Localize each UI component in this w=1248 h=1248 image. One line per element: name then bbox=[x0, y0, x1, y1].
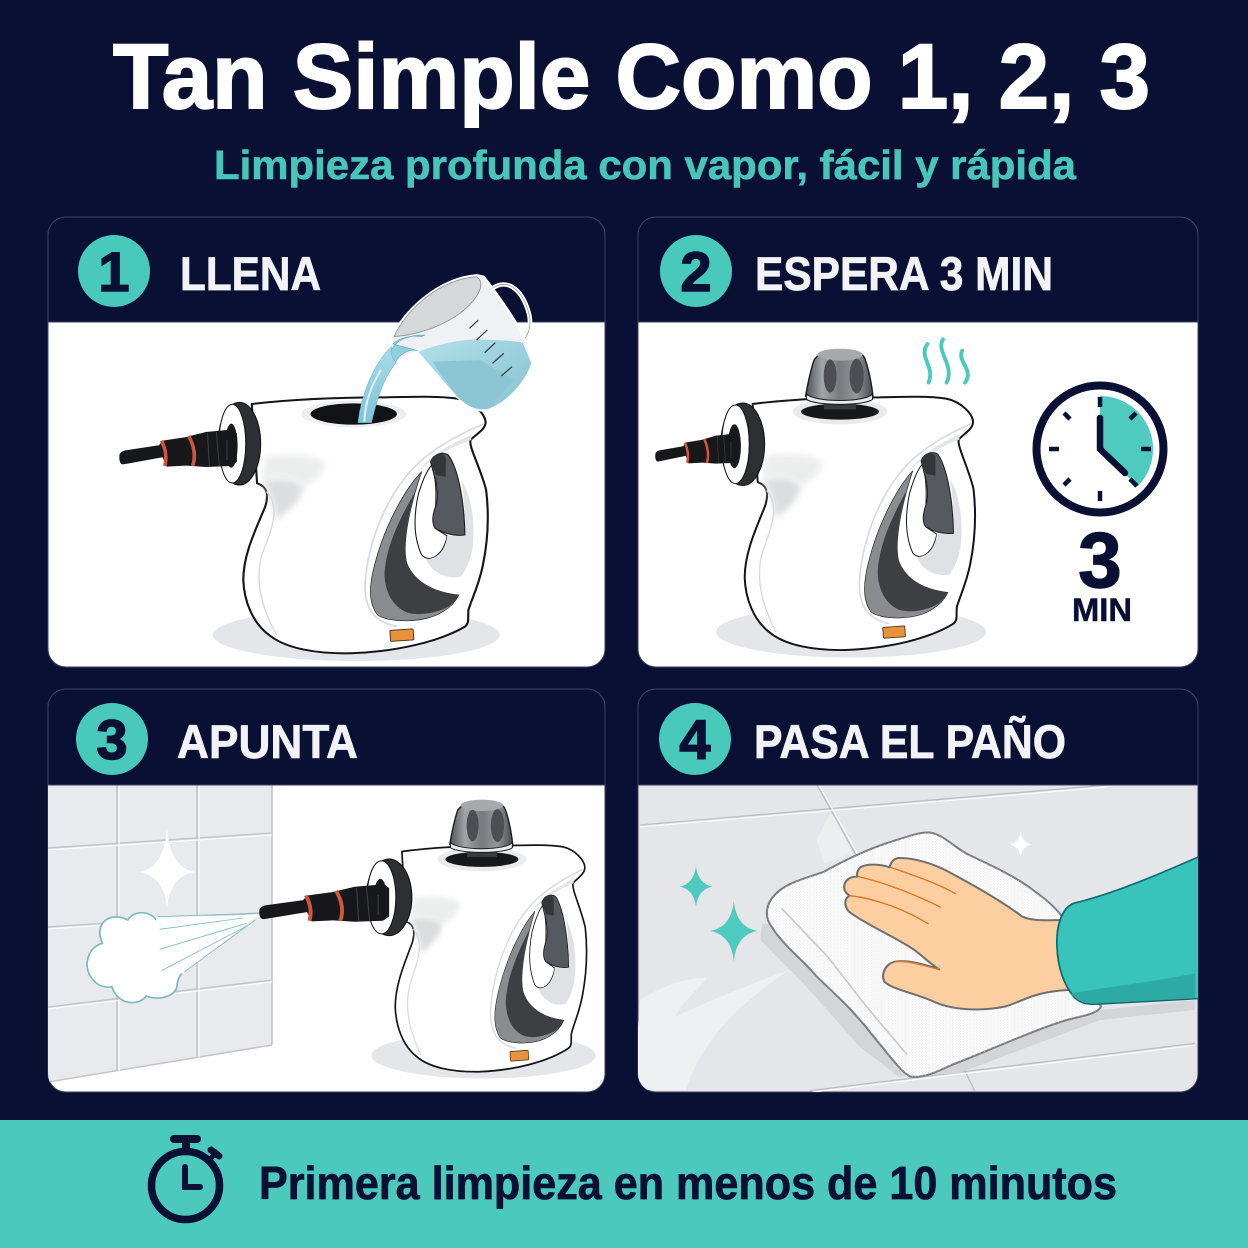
illustration: steamer knob bbox=[437, 800, 526, 871]
illustration: steamer fill opening bbox=[301, 401, 406, 427]
illustration: cloth, hand and sleeve bbox=[760, 833, 1203, 1077]
icon: white sparkle on tile bbox=[139, 828, 195, 908]
step number 4 badge: 4 bbox=[679, 708, 711, 771]
step number 2 badge bbox=[660, 235, 732, 307]
sleeve shade bbox=[1071, 973, 1195, 1004]
step heading: PASA EL PAÑO: PASA EL PAÑO bbox=[754, 715, 1066, 768]
panel header: step 3 bbox=[48, 689, 605, 785]
illustration: steamer knob bbox=[793, 349, 887, 424]
illustration: steamer nozzle bbox=[655, 433, 738, 464]
panel: step 2 wait bbox=[638, 217, 1198, 667]
illustration: steamer body bbox=[371, 845, 596, 1078]
hand bbox=[844, 858, 1068, 1009]
big number 3: 3 bbox=[1078, 516, 1122, 604]
towel fold line bbox=[782, 908, 907, 1055]
sleeve bbox=[1057, 855, 1203, 1004]
illustration: steamer nozzle bbox=[259, 883, 389, 922]
subtitle: Limpieza profunda con vapor, fácil y rápida bbox=[214, 142, 1077, 188]
step heading: APUNTA: APUNTA bbox=[177, 715, 358, 768]
step heading: ESPERA 3 MIN: ESPERA 3 MIN bbox=[755, 247, 1053, 300]
label MIN: MIN bbox=[1072, 592, 1132, 628]
towel texture bbox=[767, 833, 1101, 1077]
illustration: steamer body bbox=[213, 397, 500, 661]
illustration: steamer ring bbox=[366, 859, 412, 936]
step number 3 badge: 3 bbox=[96, 708, 128, 771]
illustration: steamer ring bbox=[721, 403, 765, 486]
illustration: tile wall bbox=[48, 785, 272, 1082]
illustration: steamer nozzle bbox=[119, 428, 237, 467]
panel header: step 4 bbox=[638, 689, 1198, 785]
step number 1 badge: 1 bbox=[98, 240, 130, 303]
icon: steam waves bbox=[925, 339, 968, 383]
panel header: step 1 bbox=[48, 217, 605, 322]
panel: step 4 wipe bbox=[633, 689, 1203, 1093]
cloth shadow bbox=[760, 923, 1195, 1077]
step number 1 badge bbox=[78, 235, 150, 307]
panel: step 3 aim bbox=[48, 689, 605, 1092]
footer text: Primera limpieza en menos de 10 minutos bbox=[259, 1157, 1117, 1209]
step number 4 badge bbox=[659, 703, 731, 775]
footer banner bbox=[0, 1120, 1248, 1248]
illustration: floor tiles with reflections bbox=[633, 785, 1195, 1093]
step heading: LLENA: LLENA bbox=[180, 247, 321, 300]
step number 2 badge: 2 bbox=[680, 240, 712, 303]
illustration: steamer ring bbox=[218, 402, 261, 485]
icon: clock showing 3 minutes bbox=[1036, 386, 1164, 512]
panel: step 1 fill bbox=[48, 217, 605, 667]
icon: measuring jug pouring water bbox=[358, 275, 532, 423]
panel header: step 2 bbox=[638, 217, 1198, 322]
illustration: steam cloud and jet bbox=[87, 913, 259, 1003]
title: Tan Simple Como 1, 2, 3 bbox=[113, 26, 1150, 128]
icon: teal and white sparkles bbox=[680, 832, 1031, 962]
step number 3 badge bbox=[76, 703, 148, 775]
icon: stopwatch bbox=[152, 1139, 220, 1220]
towel bbox=[767, 833, 1101, 1077]
illustration: steamer body bbox=[716, 397, 986, 658]
finger lines bbox=[850, 867, 956, 969]
